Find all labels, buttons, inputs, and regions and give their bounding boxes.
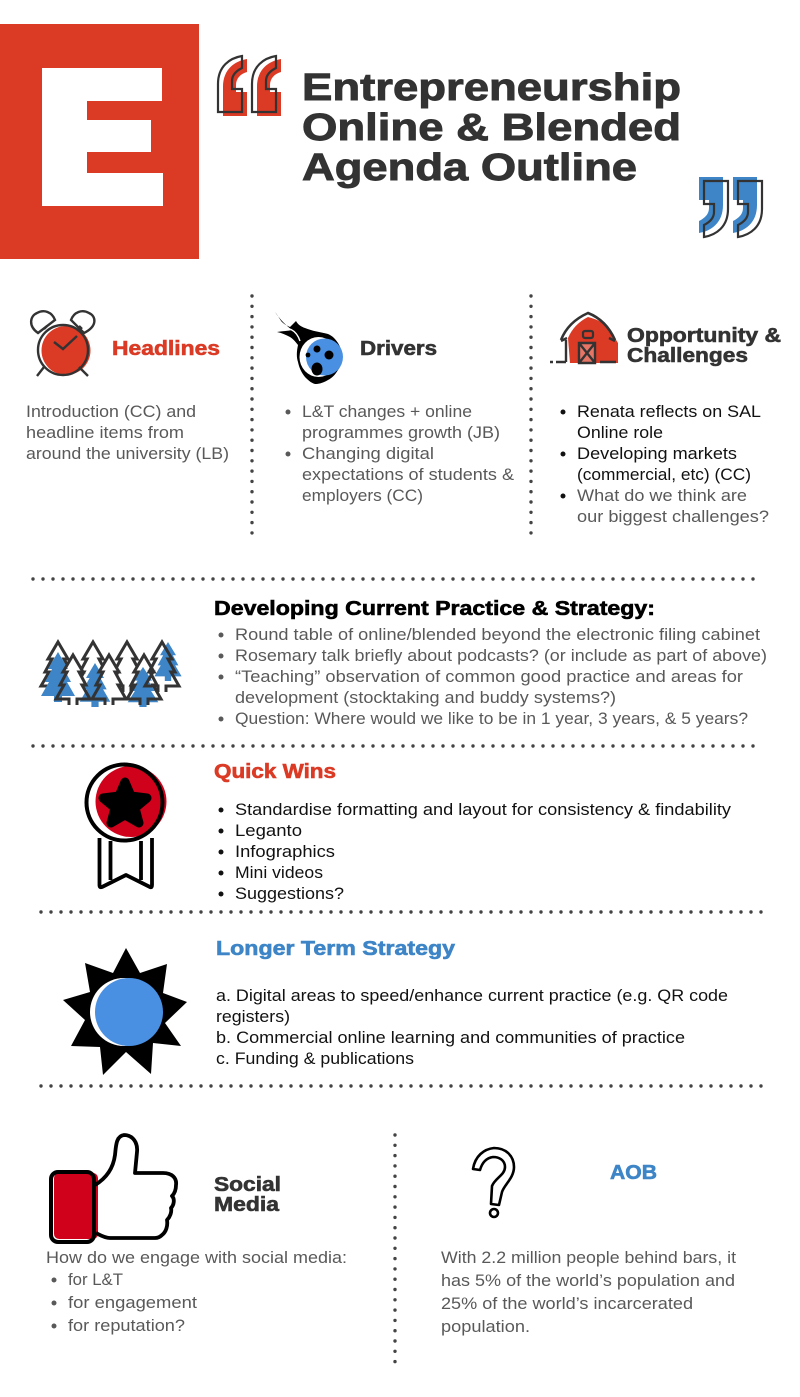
heading: AOB: AOB (610, 1162, 657, 1184)
list: drivers: programmes growth (JB) (302, 423, 500, 442)
list: practice items: “Teaching” observation of common good practice and areas for (235, 667, 743, 686)
list: practice items: Round table of online/blended beyond the electronic filing cabinet (235, 625, 760, 644)
icon: closing quotation marks (699, 177, 762, 237)
text: AOB body: With 2.2 million people behind bars, it (441, 1248, 736, 1267)
panel: drivers (275, 312, 515, 505)
icon: medal with star (86, 764, 166, 887)
heading: Headlines: Headlines (112, 338, 220, 360)
list: social media: for L&T (68, 1270, 123, 1289)
icon: thumbs up (51, 1135, 176, 1242)
heading: Social Media (214, 1174, 281, 1216)
panel: headlines (26, 311, 229, 463)
list: drivers: expectations of students & (302, 465, 515, 484)
list: practice items: development (stocktaking and buddy systems?) (235, 688, 616, 707)
title: Entrepreneurship (302, 67, 681, 109)
icon: question mark (473, 1148, 514, 1217)
list: opportunity and challenges: Online role (577, 423, 663, 442)
list: drivers: Changing digital (302, 444, 434, 463)
heading: Opportunity and Challenges: Challenges (627, 345, 748, 367)
logo: red square with white E (0, 24, 199, 259)
heading: Social Media: Social (214, 1174, 281, 1196)
list: drivers: employers (CC) (302, 486, 423, 505)
heading: Longer Term Strategy: Longer Term Strategy (216, 938, 456, 960)
heading: Quick Wins: Quick Wins (214, 761, 336, 783)
panel: AOB (441, 1148, 736, 1336)
text: strategy items: b. Commercial online learning and communities of practice (216, 1028, 685, 1047)
list: opportunity and challenges: (commercial, etc) (CC) (577, 465, 751, 484)
list: social media: for reputation? (68, 1316, 185, 1335)
heading: Drivers: Drivers (360, 338, 437, 360)
panel: opportunity and challenges (550, 313, 781, 526)
list: practice items: Question: Where would we like to be in 1 year, 3 years, & 5 years? (235, 709, 748, 728)
text: strategy items: c. Funding & publications (216, 1049, 414, 1068)
heading: Social Media: Media (214, 1194, 280, 1216)
list: social media: How do we engage with social media: (46, 1248, 347, 1267)
icon: barn (550, 313, 618, 363)
text: AOB body: population. (441, 1317, 530, 1336)
list: quick wins (218, 800, 732, 903)
heading: Opportunity and Challenges: Opportunity & (627, 325, 781, 347)
title: Agenda Outline (302, 147, 637, 189)
heading: Developing Current Practice and Strategy: Developing Current Practice & Strategy: (214, 598, 655, 620)
list: quick wins: Leganto (235, 821, 302, 840)
text: headlines body: Introduction (CC) and (26, 402, 196, 421)
panel: longer term strategy (63, 938, 728, 1075)
text: AOB body (441, 1248, 736, 1336)
list: quick wins: Suggestions? (235, 884, 344, 903)
text: strategy items (216, 986, 728, 1068)
list: opportunity and challenges: Renata reflects on SAL (577, 402, 761, 421)
title (302, 67, 681, 189)
list: opportunity and challenges: our biggest challenges? (577, 507, 769, 526)
text: AOB body: has 5% of the world’s population and (441, 1271, 735, 1290)
icon: blue sun with black rays (63, 948, 187, 1075)
text: headlines body: headline items from (26, 423, 184, 442)
list: social media (46, 1248, 347, 1335)
title: Online & Blended (302, 107, 681, 149)
text: headlines body (26, 402, 229, 463)
list: drivers: L&T changes + online (302, 402, 472, 421)
icon: opening quotation marks (218, 56, 281, 116)
icon: alarm clock (31, 311, 94, 376)
panel: quick wins (86, 761, 732, 903)
list: quick wins: Infographics (235, 842, 335, 861)
icon: pine trees (41, 642, 182, 707)
text: strategy items: registers) (216, 1007, 290, 1026)
list: practice items: Rosemary talk briefly about podcasts? (or include as part of above) (235, 646, 767, 665)
list: opportunity and challenges: Developing markets (577, 444, 737, 463)
text: strategy items: a. Digital areas to speed/enhance current practice (e.g. QR code (216, 986, 728, 1005)
list: quick wins: Mini videos (235, 863, 323, 882)
list: drivers (286, 402, 515, 505)
list: social media: for engagement (68, 1293, 197, 1312)
heading: Opportunity and Challenges (627, 325, 781, 367)
list: quick wins: Standardise formatting and layout for consistency & findability (235, 800, 732, 819)
list: opportunity and challenges: What do we think are (577, 486, 747, 505)
panel: social media (46, 1135, 347, 1335)
list: practice items (218, 625, 767, 728)
icon: meteor (275, 312, 343, 384)
text: AOB body: 25% of the world’s incarcerated (441, 1294, 693, 1313)
text: headlines body: around the university (LB) (26, 444, 229, 463)
panel: developing current practice and strategy (41, 598, 767, 728)
list: opportunity and challenges (560, 402, 769, 526)
